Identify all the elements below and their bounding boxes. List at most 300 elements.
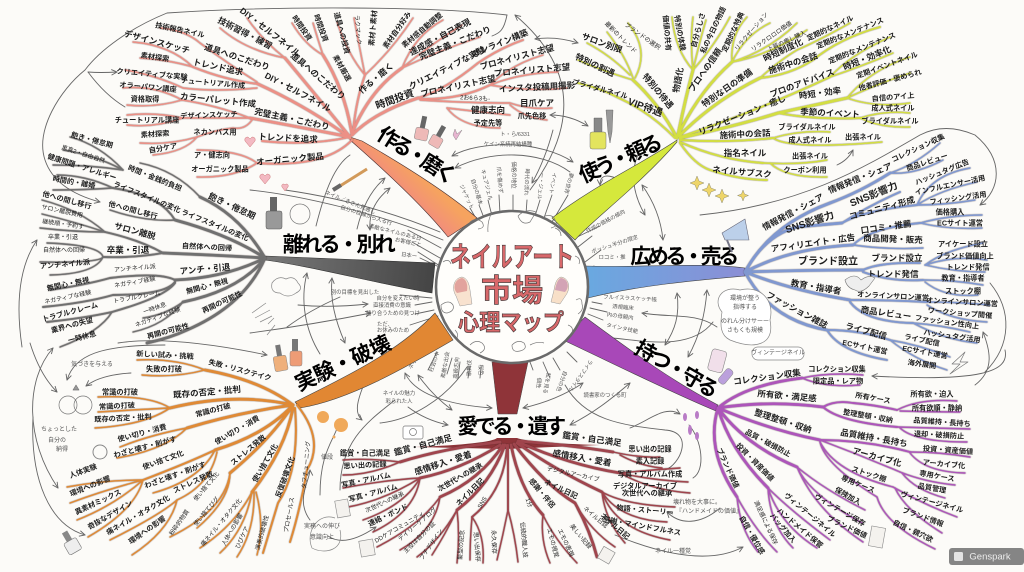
purple labels: 自信・優位感 [737,514,767,556]
maroon labels: 1分 [524,497,534,508]
logo badge: Genspark [949,548,1024,565]
pink labels: 素材厳選 [331,53,353,83]
pink labels: 完璧主義・こだわり [254,106,330,132]
blue labels: ライブ配信 [903,332,941,348]
heading: 作る・磨く: 作る・磨く [373,123,457,187]
orange labels [68,349,312,551]
blue labels: SNS影響力 [848,179,900,210]
purple labels: バッグ加入 [768,511,798,545]
icon: purple cosmetic bottles [707,348,734,385]
pink labels: 道具へのこだわり [203,42,271,72]
maroon labels: ネイル日誌 [582,505,610,530]
blue labels: ECサイト運営 [937,218,983,228]
yellow labels: プロへの信頼 [686,46,724,94]
blue labels: 情報発信・シェア [827,160,894,195]
radial note text: ジョン候補 [586,199,614,219]
pink labels [115,5,576,173]
pink labels: 自分ケア [148,141,178,155]
maroon labels: 連絡・ボンド [367,502,409,528]
doodle icons [41,110,1024,565]
maroon labels: デジタルアーカイブ [613,482,678,490]
dark labels: アンチネイル派 [40,257,91,271]
radial note text: ー・ジェル [536,172,544,200]
dark labels [40,130,257,345]
note: bottom right: 『ハンドメイドの価値』 [676,507,742,515]
icon: sleeping face [59,385,92,414]
icon: lightning [950,352,968,374]
purple labels: アーカイブ化 [922,458,966,470]
dark labels: サロン離脱費用 [41,203,84,219]
radial note text: キュアジェル [479,168,494,202]
yellow labels: 時短・効率 [798,85,842,101]
radial note text: 自分の色 [554,370,569,393]
yellow labels: 時短・効率化 [841,44,893,72]
yellow labels: 時短制度化 [762,36,805,64]
yellow labels: 季節のイベント [800,106,860,120]
purple labels: 所有欲・満足感 [757,388,818,404]
radial note text: 語り合うための見つけ [366,309,420,317]
blue labels: ブランド設立 [871,253,923,263]
purple labels: 限定品・レア物 [813,376,863,386]
maroon labels: 写真・アルバム作成 [618,470,682,478]
pink labels: DIY・セルフネイル [263,70,333,114]
heading: 広める・売る: 広める・売る [630,246,737,268]
orange labels: 新しい試み・挑戦 [136,349,195,361]
maroon labels: 物語・ストーリー [616,503,674,517]
icon: pink polish bottles [414,116,446,149]
yellow labels: 物語化 [671,66,685,93]
orange labels: 奇抜なデザイン [86,499,134,531]
pink labels: 時間投資 [374,86,416,112]
radial note lines [400,195,607,378]
yellow labels [571,5,922,180]
radial note text: 時代の流れ [523,168,531,196]
pink labels: 素材感自動調整 [400,10,444,50]
orange labels: プロセールス [283,497,296,533]
yellow labels: 最新のトレンド [603,20,638,55]
orange labels: タフチューニング [300,441,312,489]
maroon labels: ネイル日記 [543,477,579,501]
orange labels: 使い切り・消費 [213,414,261,446]
orange labels: 痛ネイル・オタク文化 [105,493,172,537]
radial note text: ネイルの魅力 [383,389,415,397]
radial note text: ポッシュ半分の限定 [590,233,640,255]
title: ネイルアート: ネイルアート [450,242,574,272]
blue labels: コレクション収集 [890,132,946,164]
radial note text: お休みのため [377,326,409,334]
pink labels: カラーパレット作成 [179,91,257,109]
icon: right fingernail [551,277,569,304]
radial note text: 桜色 [477,365,485,376]
orange labels: 人体への影響 [220,512,245,547]
orange labels: 常識の打破 [102,388,138,396]
blue branch lines [745,143,990,370]
blue labels: トレンド発信 [946,262,990,272]
dark labels: 一時休息 [142,300,167,316]
purple labels: ヴィンテージネイル [782,491,838,539]
radial note text: タインタ技能 [606,321,639,335]
pink labels: オーガニック製品 [256,151,324,167]
purple labels: ブランド価値 [826,514,868,540]
maroon labels: 感情移入・愛着 [552,448,612,468]
dark labels: ネガティブな経験 [134,305,181,329]
radial note text: 彩られた人 [386,398,413,405]
pink labels: ア・健志向 [194,150,230,160]
dark branch lines [40,137,265,347]
dark labels: 一時休息 [67,329,98,345]
purple labels: ヴィンテージネイル [900,489,964,515]
pink trunk [350,137,477,237]
pink labels: チュートリアル講座 [115,116,179,124]
purple labels: 整理整頓・収納 [753,407,813,435]
radial note text: 作成の価格の傾向 [585,207,626,235]
blue labels: 教育・指導者 [941,274,985,282]
yellow labels: 出張ネイル [845,132,881,142]
dark labels: ライフスタイルの変化 [112,179,183,215]
maroon labels: 感謝・伴侶 [527,476,557,510]
yellow labels: リラクゼーション・癒し [697,93,787,137]
maroon branch lines [343,441,690,563]
purple labels: コレクション収集 [733,367,802,387]
icon: smiling face [290,204,310,224]
dark labels: ネガティブ経験 [114,274,156,290]
blue labels: 商品レビュー [905,151,949,173]
yellow labels: 自信のアイ上 [871,91,915,103]
pink labels: 技術習得・練習 [216,15,274,51]
blue labels: アフィリエイト・広告 [770,232,856,254]
blue labels: フィッシング活用 [929,190,987,206]
dark labels: 飽き・倦怠期 [70,130,114,150]
blue labels: ファッション性向上 [914,313,980,331]
maroon labels: 永久保存 [490,530,498,554]
yellow labels: 出張ネイル [792,152,828,160]
purple labels: 品質維持・長持ち [913,416,971,428]
blue labels: 商品開発・販売 [863,233,923,245]
panel: 離れる・別れ branch [40,130,435,347]
radial note text: ジャケット [458,183,475,210]
maroon labels: DDケアコミュニティ [374,510,426,545]
note: bottom right: ネイル一種覚 [655,547,691,555]
radial note text: 直接消費の意識 [373,301,411,309]
purple labels: 投資・資産価値 [923,444,973,456]
blue labels: 教育・指導者 [790,278,842,296]
dark labels: 業界への失望 [50,315,94,335]
maroon labels: 伝統的職人技 [518,522,530,558]
yellow labels: 特別な日の準備 [700,67,755,109]
blue labels: SNS影響力 [784,208,836,236]
pink labels: 資格取得 [131,94,159,104]
logo badge: Genspark: Genspark [969,552,1011,562]
radial note text: 日本ー [401,250,418,260]
pink labels: トレンドを追求 [258,131,318,145]
note: bottom right: 壊れ物を大事に。 [673,498,721,506]
pink labels: 完璧主義・こだわり [418,24,492,62]
pink labels: 爪先色移 [518,112,546,120]
radial note text: お客様ごと [394,235,422,249]
maroon labels: 感謝・マインドフルネス [602,515,682,537]
orange labels: 既存の否定・批判 [94,412,152,424]
pink labels: 作る・磨く [357,61,395,95]
maroon labels: エモの表現 [556,527,576,558]
blue labels: ファッション雑誌 [765,290,830,331]
yellow labels: ブライダルネイル [778,122,836,132]
radial note text: 個性 [534,377,543,389]
maroon labels: 思い出の記録 [343,459,388,471]
orange labels: わざと壊す・削がす [143,460,207,490]
callout: right: 環境が整う [730,294,760,302]
pink labels: 時間投資 [312,13,330,43]
icon: brush [333,169,367,190]
heading: 持つ・守る: 持つ・守る [630,337,721,402]
radial note text: ただ、 [377,321,393,328]
maroon labels: 写真・アルバム [340,470,392,490]
radial note text: 内の母親内 [606,310,634,322]
yellow labels: 価値の共有 [661,15,673,51]
dark labels: アンチネイル派 [114,263,156,274]
orange labels: 反復破壊文化 [273,454,297,499]
purple labels [715,364,973,556]
dark labels: 他への間し移行 [108,199,158,221]
icon: smoke and hands [252,278,301,335]
orange labels: 使い捨て文化 [192,470,221,503]
pink labels: 道具へのこだわり [289,50,347,102]
purple labels: アーカイブ化 [851,446,903,468]
orange labels: ストレス発散 [172,468,215,495]
orange labels: 既存の否定・批判 [173,384,241,400]
orange labels: ひびケア [233,525,251,550]
icon: camera [403,426,423,439]
icon: handshake [845,276,875,291]
maroon labels: 鑑賞・自己満足 [393,432,454,458]
dark labels: 再開の可能性 [201,289,243,315]
radial note text: 素敵な出会 [439,350,451,379]
radial note text: 私を見る [541,372,553,394]
radial note text: フルイスラスケッチ帳 [603,293,658,303]
pink labels: クリエイティブな実験 [407,44,487,92]
yellow labels: 特別の体験 [672,15,688,52]
panel: 実験・破壊 branch [67,313,453,557]
radial note text: 別の目標を見出した [331,288,379,296]
blue trunk [585,265,745,298]
note: left [41,360,333,461]
yellow labels: 定期的なメンテナンス [815,15,885,51]
icon: pink sparkle [453,129,462,140]
blue labels: 商品レビュー [860,304,912,322]
radial note text: 歌舞伎 [465,359,473,376]
panel: 愛でる・遺す branch [340,362,690,563]
pink labels: ラクマック [353,15,362,45]
yellow labels: 特別の待遇 [641,72,676,111]
maroon labels: 思い出保存 [472,532,482,562]
blue labels: ECサイト運営 [842,338,888,356]
maroon labels: SNS [477,496,489,510]
pink labels: DIY・セルフネイル [238,5,302,59]
panel: 広める・売る branch [585,132,998,370]
radial note text: 高級志向 [451,357,461,379]
orange labels: 異素材ミックス [73,487,123,517]
yellow labels: ブライダルネイル [571,77,629,101]
orange labels: 失敗の打破 [146,364,182,374]
orange labels: 環境への影響 [127,514,167,546]
orange labels: 失敗・リスクテイク [208,357,272,383]
panel: center radial notes [324,131,658,405]
pink labels: プロネイリスト志望 [420,73,497,99]
blue labels: 価格購入 [936,208,964,216]
radial note text: ライフスタイル [566,358,595,394]
note: left: 納得 [56,445,68,453]
pink labels: クリエイティブな実験 [116,66,189,82]
orange labels: 使い捨て文化 [141,448,186,472]
orange trunk [295,313,453,408]
note: left: ちょっとした [41,426,77,433]
purple labels: 所有欲順・静納 [912,404,962,412]
purple labels: 投資・資産価値 [734,441,776,483]
maroon trunk upper [492,362,528,414]
purple labels: 所有欲・迫入 [910,390,954,398]
icon: stamps [335,499,886,564]
heading: 離れる・別れ: 離れる・別れ [283,234,396,256]
dark labels: 無関心・無視 [185,276,230,296]
yellow labels: 私の今日の物語 [698,5,728,55]
pink labels: 道具への投資 [332,11,352,55]
radial note text: 夢の世界 [562,172,576,195]
icon: megaphone [722,219,749,252]
dark labels: 健康問題・アレルギー [46,152,118,182]
maroon labels: ネイル日記 [454,476,486,508]
heading: 愛でる・遺す: 愛でる・遺す [457,416,565,438]
maroon labels: デジタルアーカイブ [546,465,600,483]
yellow labels: リラクロロロ価値 [749,19,793,53]
yellow labels: 特別の割遇 [574,51,617,79]
icon: grey polish bottle [266,197,282,229]
dark labels: 飽き・倦怠期 [207,191,257,221]
orange branch lines [67,360,314,557]
heading: 実験・破壊: 実験・破壊 [292,332,395,396]
maroon trunk lower flare [415,438,600,449]
blue labels: ブランド設立 [798,254,858,268]
pink branch lines [123,18,567,177]
yellow labels: クーポン利用 [783,166,827,174]
panel: 作る・磨く branch [115,5,576,237]
yellow trunk [552,140,677,240]
dark labels: アンチ・引退 [179,262,231,276]
note: left: 気づきを与える [71,360,113,368]
radial note text: 爪を傷めず [495,166,505,194]
purple labels: ブランド情報 [901,505,946,529]
maroon labels: 写真・アルバム [348,482,398,504]
icon: orange splashes [317,411,348,438]
dark labels: 自然体への回帰 [43,246,85,254]
blue labels: 情報発信・シェア [761,191,826,232]
maroon labels: デイリーケアログ [396,506,438,543]
orange labels: 人体実験 [68,462,99,480]
purple labels: コレクション収集 [808,364,866,374]
pink labels: デザインスケッチ [180,110,238,120]
dark labels: 時間・金銭的負担 [127,163,183,193]
yellow labels: 指名ネイル [724,148,767,158]
purple labels: 品質維持・長持ち [840,427,908,449]
rim doodles [441,211,582,353]
yellow labels: VIP待遇 [626,95,665,119]
pink labels: 健康志向 [471,105,505,115]
maroon labels: 次世代への継承 [364,490,405,515]
circle outline [436,211,588,363]
blue labels: ストック棚 [945,286,981,296]
maroon labels: 次世代への継承 [436,460,485,493]
purple trunk [563,317,718,411]
pink labels: 素材自分好み [381,10,413,50]
radial note text: ロコミ・推 [599,253,626,261]
blue labels: オンラインサロン運営 [926,296,998,308]
pink labels: インスタ投稿用撮影 [499,80,576,94]
callout: right [718,289,771,345]
icon: yellow sparkles [690,176,748,203]
pink labels: 達成感・自己表現 [408,16,473,57]
callout: right: 指導する [733,303,757,311]
yellow labels: ネイルサブスク [712,164,772,180]
pink labels: 予定先等 [474,118,502,128]
radial note text: イベント [547,172,558,194]
icon: left fingernail [454,277,472,306]
yellow labels: 上質の癒し購入 [766,29,807,54]
blue labels: ライブ配信 [844,321,888,341]
purple labels: ヴィンテージ保存 [813,492,867,528]
blue labels: ハッシュタグ広告 [914,157,970,187]
icon: orange polish bottles [273,339,302,372]
pink labels: オラーパワン講座 [119,80,177,94]
orange labels: 環境への影響 [68,474,112,498]
pink labels: プロネイリスト志望 [479,42,556,72]
maroon labels: ネイル日記 [598,511,632,541]
blue labels: ブランド価値向上 [936,252,994,260]
maroon labels: 髪型の記念 [456,530,466,560]
dark labels: ライフスタイルの変化 [180,207,251,243]
blue labels: ハッシュタグ活用 [923,328,981,344]
dark trunk [265,256,435,293]
radial note text [324,131,658,405]
purple labels: ストック棚 [851,464,887,484]
radial note text: ケイン系統再結構種 [484,140,533,148]
yellow labels: ブライダルネイル [861,116,919,126]
yellow labels: 施術中の会話 [719,128,771,140]
blue labels [761,132,998,370]
purple labels: 所有ケース [855,390,891,406]
panel: 使う・頼る branch [552,5,922,240]
icon: dropper [606,110,613,143]
maroon labels [340,430,682,562]
pink labels: 素材探索 [140,51,170,63]
pink labels: オンライン構築 [471,27,530,59]
dark labels: 時間的・離婚 [52,174,97,190]
maroon labels: 美しい記録 [568,522,593,550]
blue labels: オンラインサロン運営 [857,290,929,302]
purple labels: 品質管理 [917,481,947,495]
pink labels: 素材探索 [140,129,170,139]
callout: right: のれん分けサーー [721,317,769,325]
yellow labels: 施術中の会話 [767,50,819,76]
maroon labels: 鑑賞・自己満足 [340,448,390,458]
radial note text: 自分を変えたい時 [376,294,420,302]
maroon labels: 次世代への継承 [622,488,673,498]
radial note text: 価格の地位 [510,162,518,189]
central circle [436,211,588,363]
dark labels: トラブルクレーム [113,289,161,305]
purple branch lines [714,374,970,552]
yellow labels: 成人式ネイル [788,136,832,144]
yellow labels: 定期的なメンテナンス [827,30,897,66]
note: bottom right [655,498,742,555]
purple labels: 保険加入 [833,485,863,507]
